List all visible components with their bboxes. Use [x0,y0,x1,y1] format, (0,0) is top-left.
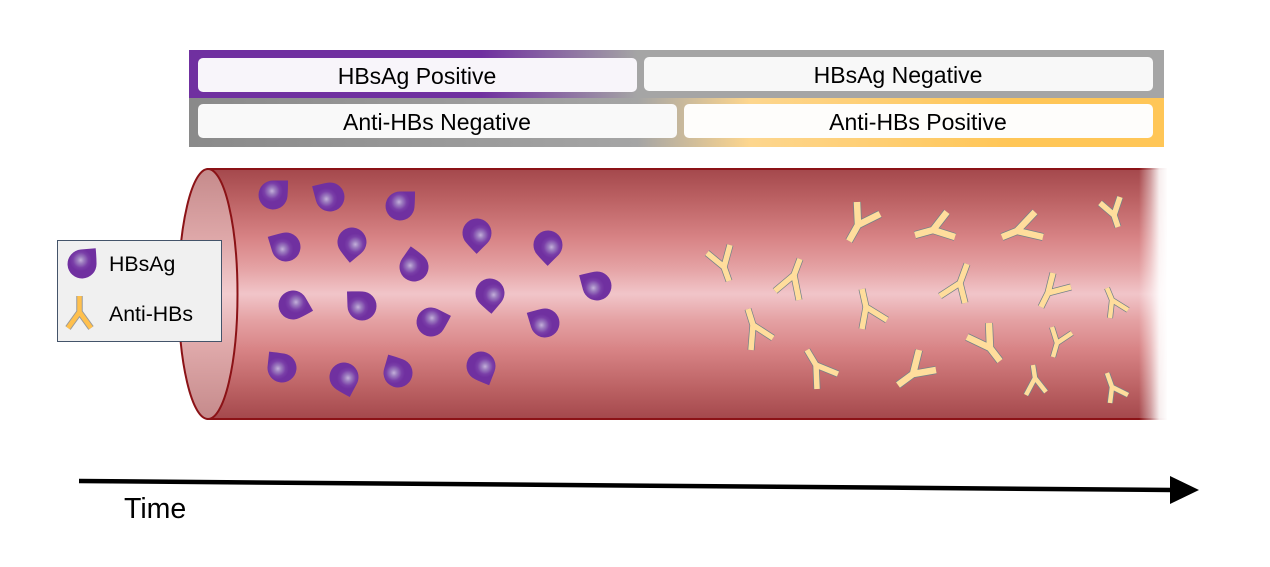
legend [58,240,222,342]
Anti-HBs antibodies [707,197,1128,403]
label: Anti-HBs Negative: Anti-HBs Negative [343,109,531,135]
label: HBsAg Positive: HBsAg Positive [338,63,496,89]
label: Anti-HBs Positive: Anti-HBs Positive [829,109,1007,135]
status header: HBsAg row [189,50,1164,98]
label: HBsAg Positive [198,58,637,92]
legend label: Anti-HBs: Anti-HBs [109,302,193,326]
time arrow [79,476,1199,504]
label: Anti-HBs Positive [684,104,1153,138]
legend label: HBsAg: HBsAg [109,252,175,276]
blood vessel [178,167,1168,421]
HBsAg particles [259,179,615,397]
axis label: Time: Time [124,493,186,525]
icon: HBsAg particle [66,248,98,280]
icon: Anti-HBs antibody [68,296,91,328]
label: HBsAg Negative: HBsAg Negative [814,62,982,88]
label: Anti-HBs Negative [198,104,677,138]
label: HBsAg Negative [644,57,1153,91]
status header: Anti-HBs row [189,98,1164,147]
